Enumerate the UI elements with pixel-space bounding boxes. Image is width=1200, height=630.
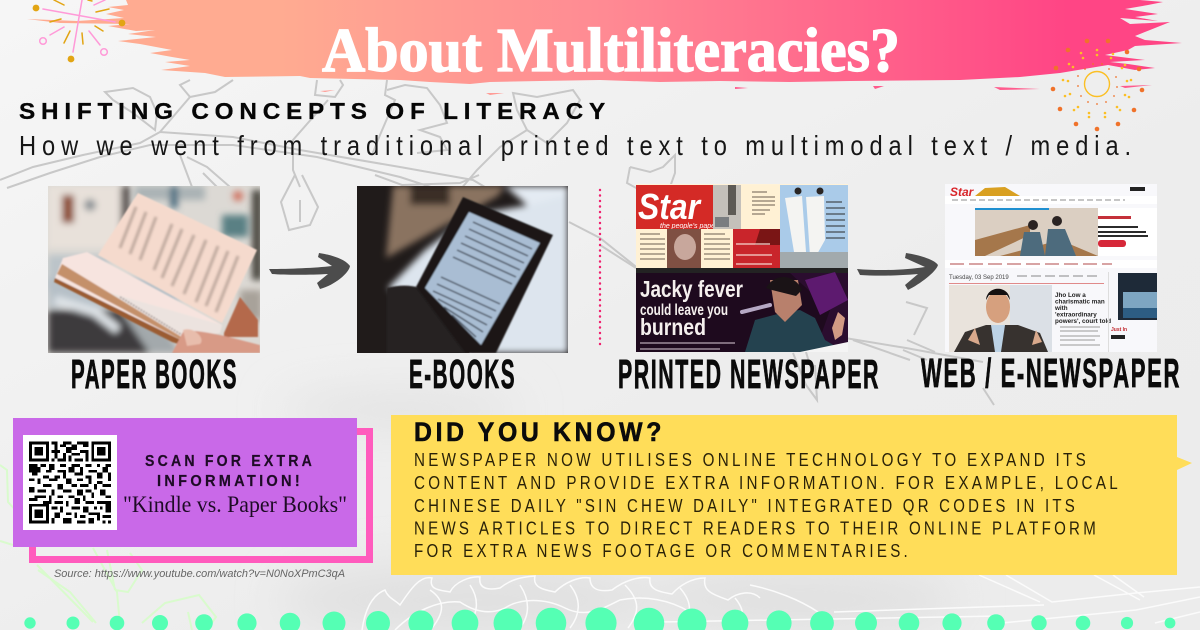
book page text bbox=[120, 207, 238, 312]
masthead text: Star bbox=[638, 186, 702, 227]
side photo bbox=[1118, 273, 1157, 320]
singer bbox=[745, 310, 833, 352]
label: paper books: PAPER BOOKS bbox=[71, 351, 238, 397]
icon: pink and gold firework bbox=[33, 0, 125, 62]
site logo: Star bbox=[950, 185, 975, 199]
photo: printed newspaper: the people's paper bbox=[660, 223, 718, 230]
lead headline: charismatic man bbox=[1055, 298, 1105, 306]
source note: Source: https://www.youtube.com/watch?v=N0NoXPmC3qA bbox=[54, 568, 345, 580]
pink frame bbox=[32, 432, 370, 560]
scan text line 1: SCAN FOR EXTRA bbox=[145, 453, 315, 470]
brush splinters bbox=[735, 85, 1152, 90]
lead headline: powers', court told bbox=[1055, 318, 1111, 325]
headline: jacky fever: Jacky fever bbox=[640, 276, 743, 302]
dotted green row bbox=[24, 607, 1175, 630]
video title: "Kindle vs. Paper Books" bbox=[123, 492, 347, 517]
lead headline: 'extraordinary bbox=[1055, 312, 1097, 318]
heading: shifting concepts: SHIFTING CONCEPTS OF LITERACY bbox=[19, 98, 611, 124]
dotted divider bbox=[599, 190, 601, 348]
arrow: newspapers bbox=[857, 253, 938, 290]
did you know body: FOR EXTRA NEWS FOOTAGE OR COMMENTARIES. bbox=[414, 540, 911, 561]
panel: did you know bbox=[391, 415, 1192, 575]
did you know heading: DID YOU KNOW? bbox=[414, 417, 665, 447]
label: e-books: E-BOOKS bbox=[409, 351, 516, 397]
scan text line 2: INFORMATION! bbox=[157, 473, 303, 490]
did you know body bbox=[414, 449, 1121, 561]
qr code bbox=[23, 435, 117, 530]
photo: web newspaper bbox=[945, 184, 1157, 352]
lead headline: Jho Low a bbox=[1055, 292, 1086, 299]
headline: could leave you: could leave you bbox=[640, 302, 728, 319]
banner ad bbox=[975, 208, 1157, 256]
arrow: books bbox=[269, 253, 350, 289]
title brush stroke bbox=[27, 0, 1182, 84]
label: printed newspaper: PRINTED NEWSPAPER bbox=[618, 351, 880, 397]
panel: scan for extra information bbox=[13, 418, 357, 547]
lead headline: with bbox=[1054, 305, 1068, 312]
lead headline bbox=[1054, 292, 1111, 325]
background line art: grey branches and leaves bbox=[0, 80, 994, 405]
lead photo bbox=[949, 285, 1010, 352]
background line art: pale green leaves bottom left bbox=[0, 465, 216, 630]
photo: printed newspaper bbox=[636, 184, 848, 352]
masthead block bbox=[636, 185, 713, 229]
date line: Tuesday, 03 Sep 2019 bbox=[949, 275, 1009, 281]
headline: burned: burned bbox=[640, 314, 706, 340]
photo: e-books bbox=[357, 186, 568, 353]
photo: paper books bbox=[48, 186, 262, 353]
title: About Multiliteracies? bbox=[322, 17, 900, 85]
photo: web newspaper: Just In bbox=[1111, 327, 1127, 333]
background line art: white foliage and branches bottom right bbox=[362, 575, 1200, 630]
icon: orange sun burst bbox=[1051, 39, 1144, 131]
